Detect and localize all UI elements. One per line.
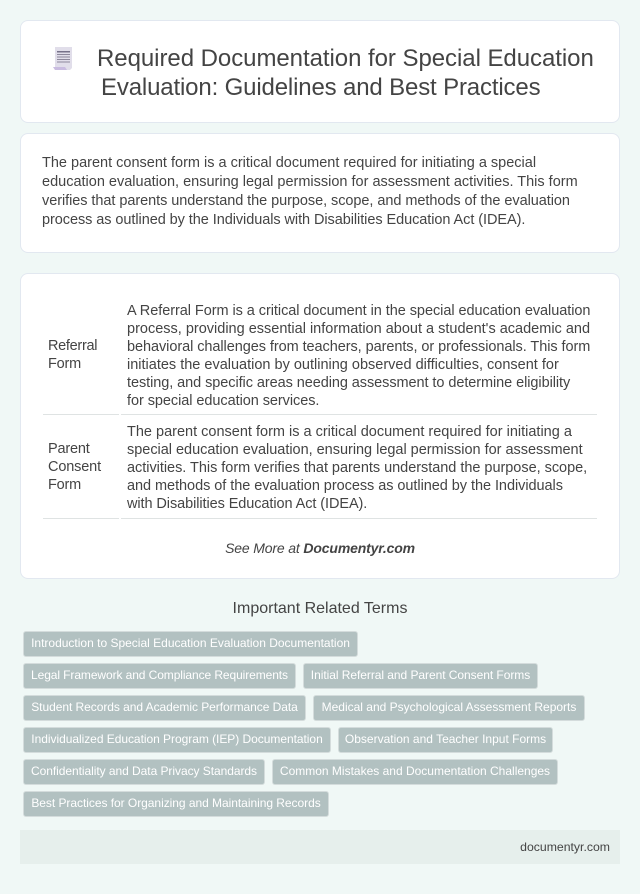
row: Referral Form: testing, and specific areas needing assessment to determine eligibility [127, 375, 570, 391]
row: Referral Form: Form [48, 356, 81, 372]
row: Parent Consent Form: with Disabilities Education Act (IDEA). [127, 496, 367, 512]
row: Parent Consent Form [43, 424, 597, 519]
row: Referral Form: process, providing essential information about a student's academic and [127, 321, 590, 337]
table panel [20, 273, 620, 579]
related terms tags: Legal Framework and Compliance Requirements [31, 668, 288, 682]
row: Referral Form: A Referral Form is a critical document in the special education evaluation [127, 303, 590, 319]
related terms tags: Medical and Psychological Assessment Reports [322, 700, 576, 714]
header panel [20, 20, 620, 123]
see more link: See More at Documentyr.com [225, 540, 415, 556]
row: Parent Consent Form: Parent [48, 441, 90, 457]
row: Referral Form: for special education services. [127, 393, 319, 409]
intro text panel [20, 133, 620, 253]
intro text panel: education evaluation, ensuring legal permission for assessment activities. This form [42, 174, 578, 190]
footer bar [20, 830, 620, 864]
related terms tags [23, 631, 585, 817]
row: Parent Consent Form: Consent [48, 459, 101, 475]
intro text panel: verifies that parents understand the purpose, scope, and methods of the evaluation [42, 193, 570, 209]
related terms tags: Student Records and Academic Performance Data [31, 700, 298, 714]
related terms tags: Initial Referral and Parent Consent Forms [311, 668, 530, 682]
title: Required Documentation for Special Education [97, 45, 594, 72]
row: Parent Consent Form: special education evaluation, ensuring legal permission for assessment [127, 442, 583, 458]
related terms tags: Introduction to Special Education Evaluation Documentation [31, 636, 350, 650]
row: Parent Consent Form: Form [48, 477, 81, 493]
row: Parent Consent Form: and methods of the evaluation process as outlined by the Individuals [127, 478, 563, 494]
icon: document scroll [53, 47, 72, 70]
footer source: documentyr.com [520, 840, 610, 854]
related terms tags: Observation and Teacher Input Forms [345, 732, 546, 746]
related terms tags: Confidentiality and Data Privacy Standards [31, 764, 257, 778]
related terms heading: Important Related Terms [233, 600, 407, 617]
intro text panel: The parent consent form is a critical document required for initiating a special [42, 155, 536, 171]
related terms tags: Common Mistakes and Documentation Challenges [280, 764, 550, 778]
row: Parent Consent Form: The parent consent form is a critical document required for initiating a [127, 424, 572, 440]
row: Referral Form: initiates the evaluation by outlining observed difficulties, consent for [127, 357, 559, 373]
row: Referral Form [43, 303, 597, 415]
title [97, 45, 594, 101]
related terms tags: Best Practices for Organizing and Maintaining Records [31, 796, 321, 810]
row: Referral Form: Referral [48, 338, 97, 354]
row: Referral Form: behavioral challenges from teachers, parents, or professionals. This form [127, 339, 590, 355]
title: Evaluation: Guidelines and Best Practices [101, 74, 540, 101]
related terms tags: Individualized Education Program (IEP) Documentation [31, 732, 323, 746]
row: Parent Consent Form: activities. This form verifies that parents understand the purpose, scope, [127, 460, 587, 476]
intro text panel: process as outlined by the Individuals with Disabilities Education Act (IDEA). [42, 212, 525, 228]
